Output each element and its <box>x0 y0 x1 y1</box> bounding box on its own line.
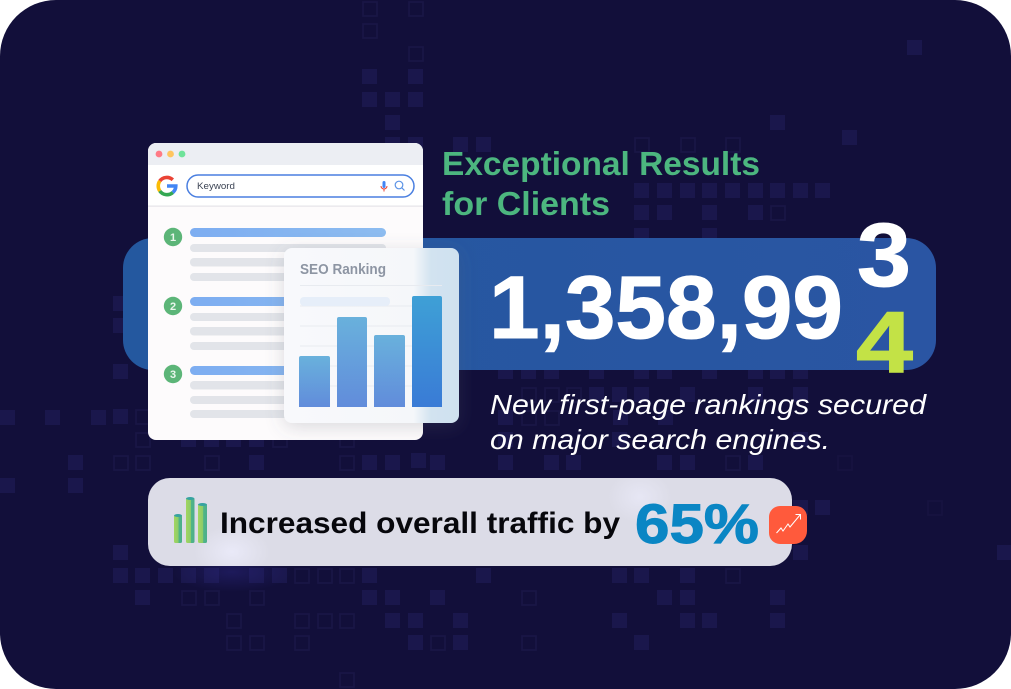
subtitle text: New first-page rankings secured <box>490 389 928 420</box>
rank badge 3: 3 <box>170 369 176 381</box>
heading <box>442 145 760 222</box>
heading: for Clients <box>442 185 610 222</box>
rank badge 3 <box>164 365 182 383</box>
browser window <box>148 143 423 440</box>
heading: SEO Ranking: SEO Ranking <box>300 262 386 278</box>
glow under bottom card <box>172 552 292 592</box>
stat value: 65% <box>635 492 759 555</box>
result 1 <box>190 228 386 281</box>
title bar <box>148 143 423 165</box>
result 3 <box>190 366 386 418</box>
window dots <box>156 151 185 157</box>
rolling digit: 4: 4 <box>856 294 913 391</box>
big number: 1,358,99 <box>489 257 843 357</box>
rank badge 1: 1 <box>170 232 176 244</box>
search keyword: Keyword <box>197 181 235 192</box>
icon: 3D bar chart <box>174 497 207 543</box>
heading: Exceptional Results <box>442 145 760 182</box>
search box <box>187 175 414 197</box>
subtitle text <box>490 389 928 455</box>
stat label: Increased overall traffic by <box>220 507 620 540</box>
address area <box>148 165 423 206</box>
icon: microphone <box>381 181 387 192</box>
subtitle text: on major search engines. <box>490 424 830 455</box>
icon: magnifier <box>395 181 404 190</box>
icon: growth arrow badge <box>769 506 807 544</box>
rank badge 2: 2 <box>170 301 176 313</box>
rank badge 1 <box>164 228 182 246</box>
icon: google logo <box>158 177 176 195</box>
bar chart <box>299 296 442 407</box>
blue highlight band <box>123 238 936 370</box>
result 2 <box>190 297 386 350</box>
rank badge 2 <box>164 297 182 315</box>
bottom stat card <box>148 478 807 566</box>
rolling digit: 3: 3 <box>857 206 911 306</box>
panel: SEO ranking chart <box>284 248 459 423</box>
